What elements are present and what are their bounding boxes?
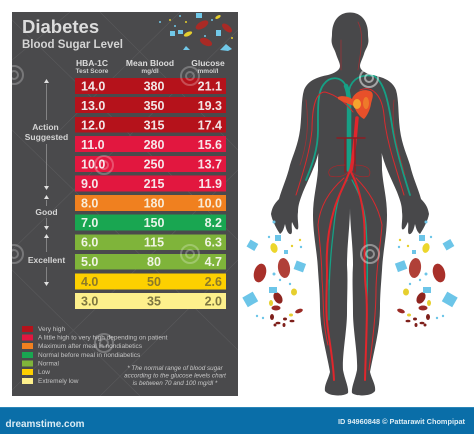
table: blood sugar levels: 2.6 — [205, 275, 222, 289]
table: blood sugar levels: 80 — [147, 255, 161, 269]
icon: scattered sugar cubes and blood cells — [159, 13, 234, 51]
range labels with arrows — [25, 79, 68, 286]
table: blood sugar levels: 50 — [147, 275, 161, 289]
table: blood sugar levels: 380 — [144, 80, 164, 94]
table: blood sugar levels: 21.1 — [198, 80, 222, 94]
column headers — [76, 58, 225, 75]
icon: sugar cubes and blood cells, right — [395, 220, 458, 327]
table: blood sugar levels: 35 — [147, 294, 161, 308]
footer bar: ID 94960848 © Pattarawit Chompipat — [338, 418, 466, 426]
table: blood sugar levels: 19.3 — [198, 99, 222, 113]
column headers: Test Score — [76, 68, 109, 75]
table: blood sugar levels: 3.0 — [81, 294, 98, 308]
table: blood sugar levels: 250 — [144, 158, 164, 172]
table: blood sugar levels — [75, 78, 226, 309]
legend: Normal — [38, 360, 60, 368]
legend: Normal before meal in nondiabetics — [38, 352, 141, 359]
column headers: Mean Blood — [126, 58, 174, 68]
table: blood sugar levels: 13.0 — [81, 99, 105, 113]
title: Diabetes — [22, 16, 99, 37]
title: Blood Sugar Level — [22, 39, 123, 51]
legend: A little high to very high depending on patient — [38, 334, 168, 342]
table: blood sugar levels: 8.0 — [81, 196, 98, 210]
watermark spiral on shoulder — [360, 69, 378, 87]
note: normal range: according to the glucose levels chart — [124, 372, 226, 380]
table: blood sugar levels: 350 — [144, 99, 164, 113]
column headers: HBA-1C — [76, 58, 108, 68]
table: blood sugar levels: 2.0 — [205, 294, 222, 308]
table: blood sugar levels: 11.9 — [198, 177, 222, 191]
legend: Extremely low — [38, 378, 79, 385]
column headers: Glucose — [191, 58, 225, 68]
table: blood sugar levels: 315 — [144, 118, 164, 132]
table: blood sugar levels: 280 — [144, 138, 164, 152]
footer bar — [0, 407, 474, 434]
note: normal range: * The normal range of blood sugar — [127, 365, 224, 372]
range labels with arrows: Suggested — [25, 132, 68, 142]
table: blood sugar levels: 4.0 — [81, 275, 98, 289]
table: blood sugar levels: 180 — [144, 196, 164, 210]
table: blood sugar levels: 11.0 — [81, 138, 105, 152]
table: blood sugar levels: 115 — [144, 236, 164, 250]
table: blood sugar levels: 13.7 — [198, 158, 222, 172]
table: blood sugar levels: 6.0 — [81, 236, 98, 250]
title — [22, 16, 123, 51]
watermark spiral on leg — [361, 245, 379, 263]
body silhouette — [271, 12, 429, 395]
column headers: mmol/l — [198, 68, 219, 75]
table: blood sugar levels: 15.6 — [198, 138, 222, 152]
footer bar: dreamstime.com — [6, 418, 84, 430]
table: blood sugar levels: 5.0 — [81, 255, 98, 269]
table: blood sugar levels: 215 — [144, 177, 164, 191]
legend — [22, 326, 168, 385]
table: blood sugar levels: 150 — [144, 216, 164, 230]
table: blood sugar levels: 9.0 — [81, 177, 98, 191]
icon: heart — [338, 90, 373, 119]
table: blood sugar levels: 10.0 — [81, 158, 105, 172]
note: normal range — [124, 365, 226, 387]
range labels with arrows: Good — [35, 207, 58, 217]
table: blood sugar levels: 14.0 — [81, 80, 105, 94]
table: blood sugar levels: 10.0 — [198, 196, 222, 210]
note: normal range: is between 70 and 100 mg/dl * — [133, 380, 218, 387]
range labels with arrows: Action — [32, 122, 59, 132]
circulatory system: veins and arteries — [296, 22, 410, 380]
table: blood sugar levels: 12.0 — [81, 118, 105, 132]
icon: sugar cubes and blood cells, left — [242, 220, 306, 327]
legend: Maximum after meal in nondiabetics — [38, 343, 143, 350]
range labels with arrows: Excellent — [28, 255, 65, 265]
column headers: mg/dl — [141, 68, 159, 75]
legend: Low — [38, 369, 50, 376]
table: blood sugar levels: 4.7 — [205, 255, 222, 269]
table: blood sugar levels: 7.0 — [81, 216, 98, 230]
legend: Very high — [38, 326, 65, 333]
table: blood sugar levels: 6.3 — [205, 236, 222, 250]
table: blood sugar levels: 17.4 — [198, 118, 222, 132]
watermark spirals — [5, 66, 199, 352]
table: blood sugar levels: 8.2 — [205, 216, 222, 230]
panel: blood sugar chart background — [12, 12, 238, 396]
